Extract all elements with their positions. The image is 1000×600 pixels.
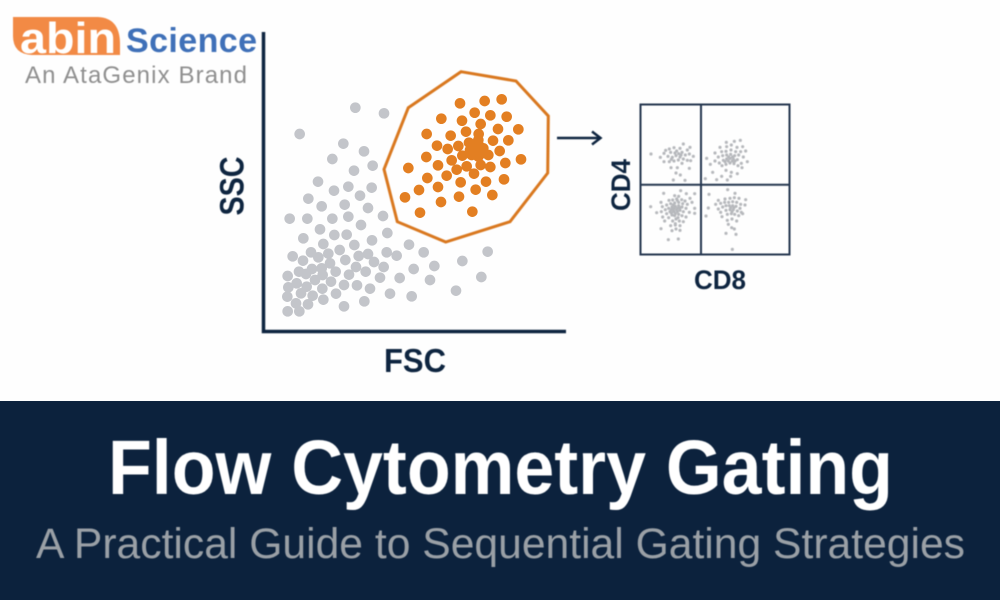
- quadrant x label CD8: CD8: [694, 265, 746, 295]
- logo: Science wordmark: Science: [126, 22, 257, 60]
- logo: [13, 14, 257, 89]
- quadrant y label CD4: CD4: [606, 159, 636, 211]
- arrow to quadrant plot: [557, 132, 600, 144]
- scatter plot axes: [264, 32, 566, 332]
- logo: brand tagline: An AtaGenix Brand: [25, 62, 247, 89]
- polygon gate: [384, 72, 548, 242]
- x axis label FSC: FSC: [384, 342, 446, 379]
- title banner: [0, 401, 1000, 600]
- main title: Flow Cytometry Gating: [108, 425, 893, 511]
- quadrant dots: CD4- CD8+: [706, 190, 746, 249]
- orange gated population: [405, 99, 521, 213]
- banner background: [0, 401, 1000, 600]
- quadrant dots: CD4+ CD8-: [651, 144, 693, 180]
- subtitle: A Practical Guide to Sequential Gating Strategies: [36, 520, 965, 568]
- logo: orange abin badge: [13, 17, 120, 55]
- quadrant frame: [640, 104, 790, 254]
- gray cell population: [287, 108, 488, 311]
- logo: abin wordmark: abin: [20, 14, 116, 63]
- y axis label SSC: SSC: [214, 156, 252, 216]
- quadrant dots: CD4- CD8-: [651, 191, 695, 240]
- quadrant dots: CD4+ CD8+: [705, 140, 747, 180]
- quadrant plot: [606, 104, 790, 295]
